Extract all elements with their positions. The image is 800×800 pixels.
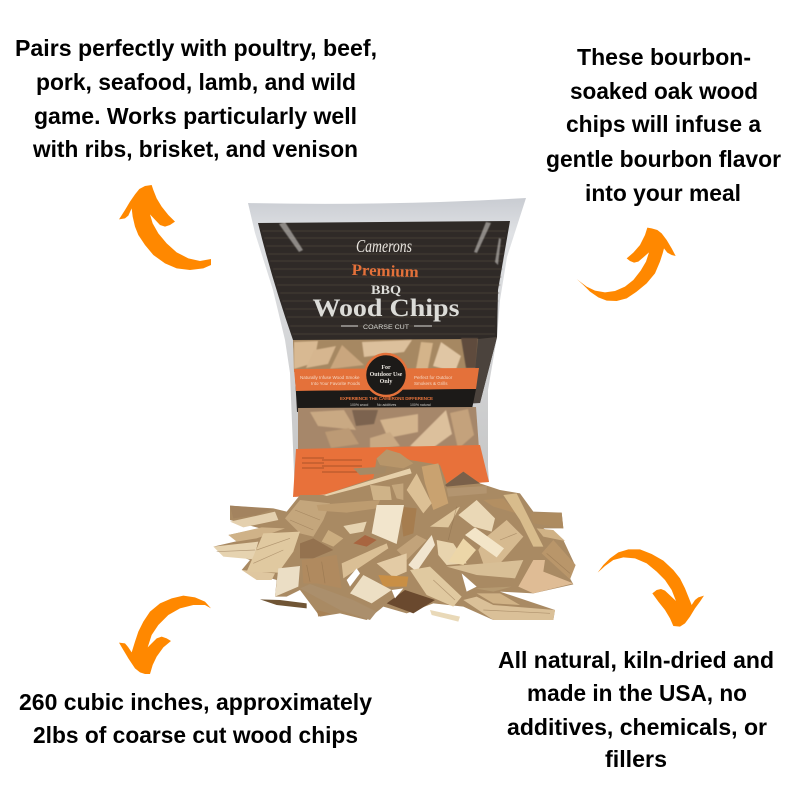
- bag: brand and product title: Wood Chips: [312, 295, 460, 322]
- text: size and weight: [19, 689, 372, 748]
- text: pairings: with ribs, brisket, and venison: [32, 136, 358, 162]
- bag: banner text: Naturally Infuse Wood Smoke: [300, 375, 360, 380]
- bag: brand and product title: COARSE CUT: [363, 325, 409, 331]
- text: all natural: [498, 647, 774, 772]
- product: bag of wood chips: [248, 198, 526, 497]
- bag: brand and product title: Camerons: [356, 236, 412, 256]
- text: all natural: additives, chemicals, or: [507, 714, 767, 740]
- bag: banner text: 100% natural: [410, 403, 431, 407]
- text: bourbon flavor: into your meal: [585, 180, 741, 206]
- text: all natural: fillers: [605, 746, 667, 772]
- bag: brand and product title: BBQ: [371, 282, 401, 297]
- arrow: bottom right, pointing down: [598, 549, 704, 627]
- bag: brand and product title: [312, 236, 460, 331]
- arrow: top right, pointing up: [577, 228, 676, 301]
- bag: upper chip window: [293, 339, 479, 372]
- bag: right side shadow: [472, 337, 497, 403]
- text: pairings: [15, 35, 377, 162]
- text: pairings: game. Works particularly well: [34, 103, 357, 129]
- bag: banner text: No additives: [377, 403, 397, 407]
- text: size and weight: 2lbs of coarse cut wood chips: [33, 722, 358, 748]
- text: bourbon flavor: These bourbon-: [577, 44, 751, 70]
- bag: banner text: [300, 375, 453, 407]
- bag: outdoor use badge: [365, 354, 407, 396]
- text: bourbon flavor: soaked oak wood: [570, 78, 758, 104]
- text: all natural: All natural, kiln-dried and: [498, 647, 774, 673]
- bag: brand and product title: Premium: [351, 262, 420, 281]
- text: pairings: Pairs perfectly with poultry, beef,: [15, 35, 377, 61]
- bag: clear plastic wrapper: [248, 198, 526, 497]
- bag: banner text: Into Your Favorite Foods: [311, 381, 361, 386]
- bag: outdoor use badge: Outdoor Use: [370, 372, 403, 378]
- bag: lower chip window: [298, 407, 479, 450]
- bag: outdoor use badge: For: [381, 365, 391, 371]
- arrow: bottom left, pointing down: [119, 596, 211, 674]
- text: bourbon flavor: chips will infuse a: [566, 111, 762, 137]
- text: size and weight: 260 cubic inches, approximately: [19, 689, 372, 715]
- bag: black band: [296, 389, 476, 411]
- bag: banner text: EXPERIENCE THE CAMERONS DIFFERENCE: [340, 396, 433, 401]
- text: bourbon flavor: [546, 44, 781, 206]
- bag: banner text: Smokers & Grills: [414, 381, 448, 386]
- bag: banner text: Perfect for Outdoor: [414, 375, 453, 380]
- bag: orange banner: [294, 368, 479, 391]
- bag: banner text: 100% wood: [350, 403, 368, 407]
- bag: dark wood label: [258, 221, 510, 412]
- arrow: top left, pointing up: [119, 185, 211, 270]
- text: bourbon flavor: gentle bourbon flavor: [546, 146, 781, 172]
- bag: outdoor use badge: Only: [380, 379, 392, 385]
- text: all natural: made in the USA, no: [527, 680, 747, 706]
- wood chip pile: [213, 449, 576, 622]
- bag: orange bottom panel: [293, 445, 489, 497]
- text: pairings: pork, seafood, lamb, and wild: [36, 69, 356, 95]
